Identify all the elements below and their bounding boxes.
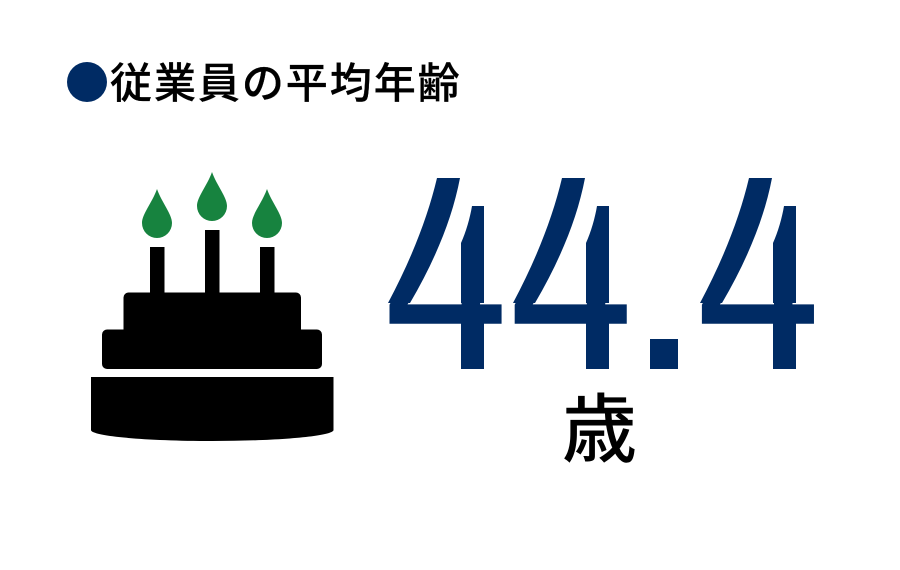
icon: navy bullet (67, 62, 107, 102)
heading: average employee age (67, 60, 462, 107)
big number: 44.4 (384, 116, 820, 427)
stylised cut in the digit 4 (384, 170, 802, 372)
unit: years old: 歳 (562, 388, 637, 472)
cake candles (150, 230, 274, 297)
icon: birthday cake (91, 172, 334, 441)
heading text: 従業員の平均年齢 (110, 60, 462, 107)
cake tiers (91, 292, 334, 441)
candle flames (142, 172, 282, 238)
number text: 44.4 (384, 116, 820, 427)
